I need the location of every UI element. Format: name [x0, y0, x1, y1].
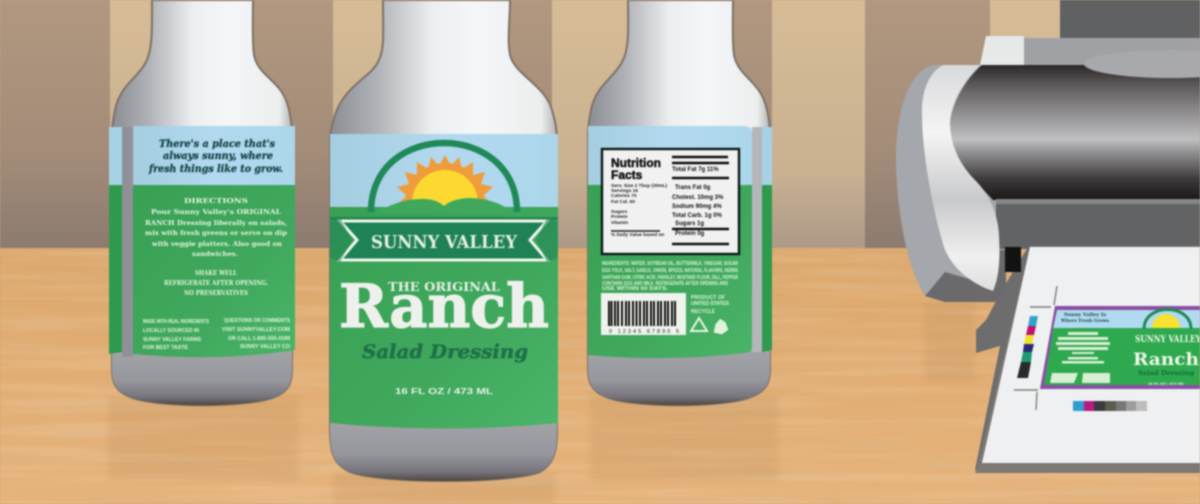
banner: Sunny Valley	[330, 217, 558, 262]
directions text: RANCH Dressing liberally on salads,	[145, 219, 287, 227]
label sliver wrapping around	[109, 127, 133, 357]
printer: white swoosh	[922, 65, 999, 291]
nutrition facts box: Sugars 1g	[675, 221, 704, 227]
company text: SUNNY VALLEY CO	[240, 344, 290, 350]
ingredients text: EGG YOLK, SALT, GARLIC, ONION, SPICES, NATURAL FLAVORS, HERBS	[602, 268, 738, 274]
proof: volume: 16 FL OZ / 473 ML	[1148, 381, 1184, 386]
ingredients text: CONTAINS EGG AND MILK. REFRIGERATE AFTER OPENING AND	[602, 281, 728, 287]
proof: Salad Dressing: Salad Dressing	[1138, 369, 1194, 377]
wooden table	[0, 248, 1200, 504]
printer: outer shell	[896, 65, 1005, 302]
bottle base: center	[330, 420, 557, 481]
nutrition facts box: Serv. Size 2 Tbsp (30mL)	[611, 183, 668, 189]
banner: Sunny Valley: SUNNY VALLEY	[371, 232, 518, 253]
heading: Salad Dressing: Salad Dressing	[362, 341, 528, 363]
printer: top band	[1024, 38, 1200, 68]
bottle: right, nutrition label	[588, 0, 772, 405]
icon: sun and hill logo	[371, 143, 517, 213]
directions text: NO PRESERVATIVES	[184, 289, 248, 297]
nutrition facts box: Sodium 90mg 4%	[672, 204, 722, 210]
tagline: There's a place that's	[159, 138, 275, 150]
front label panel	[330, 134, 558, 428]
company text: OR CALL 1-800-555-0199	[228, 336, 290, 342]
proof: white text blocks	[1050, 332, 1110, 383]
printer: rear housing	[1060, 0, 1200, 40]
directions text	[145, 197, 287, 297]
label sliver wrapping around	[752, 127, 772, 352]
nutrition facts box: Facts	[611, 168, 643, 182]
nutrition facts box: Total Carb. 1g 0%	[672, 213, 723, 219]
printed sheet	[975, 246, 1200, 473]
net volume: 16 FL OZ / 473 ML	[395, 386, 493, 396]
company text	[143, 318, 291, 351]
icon: recycling symbol	[713, 318, 729, 335]
company text: SUNNY VALLEY FARMS	[143, 337, 201, 343]
icon: recycling triangle	[691, 318, 707, 331]
nutrition facts box: Cholest. 10mg 3%	[672, 195, 724, 201]
nutrition facts box: Calories 70	[611, 193, 637, 199]
ingredients text: XANTHAN GUM, CITRIC ACID, PARSLEY, MUSTARD FLOUR, DILL, PEPPER	[602, 275, 738, 281]
nutrition facts box: Protein	[611, 214, 628, 220]
company text: QUESTIONS OR COMMENTS	[224, 318, 290, 324]
directions text: SHAKE WELL	[195, 269, 237, 277]
black feed slot	[1005, 247, 1021, 272]
directions text: sandwiches.	[192, 250, 238, 258]
ingredients text: USE WITHIN 60 DAYS.	[602, 286, 669, 292]
heading: The Original: THE ORIGINAL	[388, 279, 500, 294]
heading: Ranch: Ranch	[339, 272, 549, 342]
ingredients text: INGREDIENTS: WATER, SOYBEAN OIL, BUTTERMILK, VINEGAR, SUGAR	[602, 261, 738, 267]
nutrition facts box: Nutrition	[611, 156, 661, 170]
ingredients text	[602, 261, 738, 292]
packaging note: RECYCLE	[691, 309, 716, 315]
printer	[896, 0, 1200, 473]
table reflections	[108, 302, 975, 504]
directions text: with veggie platters. Also good on	[151, 240, 282, 248]
company text: VISIT SUNNYVALLEY.COM	[222, 327, 291, 333]
back label panel	[133, 126, 295, 357]
directions text: Pour Sunny Valley's ORIGINAL	[151, 208, 281, 216]
nutrition facts box	[602, 149, 739, 254]
paper feed tray	[975, 247, 1200, 472]
printer: lid ellipse	[1084, 50, 1200, 78]
bottle: left, back label	[109, 0, 295, 405]
proof: Ranch: Ranch	[1133, 350, 1199, 370]
printer: dark roller	[950, 65, 1200, 200]
printed label proof	[1040, 306, 1200, 389]
packaging note: PRODUCT OF	[691, 295, 725, 301]
company text: FOR BEST TASTE	[143, 345, 188, 351]
proof: sun logo	[1144, 310, 1191, 329]
nutrition facts box: Fat Cal. 60	[611, 199, 635, 205]
printer: white tab	[980, 36, 1024, 65]
wall stripes	[0, 0, 1200, 250]
tagline	[148, 138, 283, 175]
tagline: fresh things like to grow.	[148, 163, 283, 175]
proof: back-panel text: Sunny Valley Is	[1064, 312, 1106, 318]
barcode: 0 12345 67890 5	[609, 329, 679, 335]
tagline: always sunny, where	[163, 150, 273, 162]
nutrition facts box: Total Fat 7g 11%	[672, 167, 719, 173]
directions text: REFRIGERATE AFTER OPENING.	[164, 279, 268, 287]
company text: MADE WITH REAL INGREDIENTS	[143, 319, 209, 325]
nutrition facts box: Vitamin	[611, 220, 628, 226]
nutrition label panel	[588, 126, 752, 358]
bottle: center, front label	[330, 0, 558, 481]
packaging note	[691, 295, 730, 315]
crop marks	[1014, 286, 1057, 410]
vertical colour bar	[1017, 316, 1038, 378]
printer: lower band	[996, 199, 1200, 249]
nutrition facts box: Servings 16	[611, 188, 638, 194]
nutrition facts box: % Daily Value based on	[611, 232, 664, 238]
directions text: DIRECTIONS	[184, 197, 248, 205]
printed label proof: Where Fresh Grows	[1060, 318, 1109, 324]
company text: LOCALLY SOURCED IN	[143, 328, 199, 334]
nutrition facts box: Sugars	[611, 209, 628, 215]
bottle base: left	[112, 350, 292, 405]
barcode	[601, 293, 686, 335]
horizontal colour bar	[1073, 401, 1147, 411]
bottle base: right	[588, 350, 770, 405]
packaging note: UNITED STATES	[691, 301, 730, 307]
directions text: mix with fresh greens or serve on dip	[145, 229, 287, 237]
printer: lower shell	[925, 250, 1006, 302]
nutrition facts box: Protein 0g	[675, 231, 705, 237]
nutrition facts box: Trans Fat 0g	[675, 185, 711, 191]
